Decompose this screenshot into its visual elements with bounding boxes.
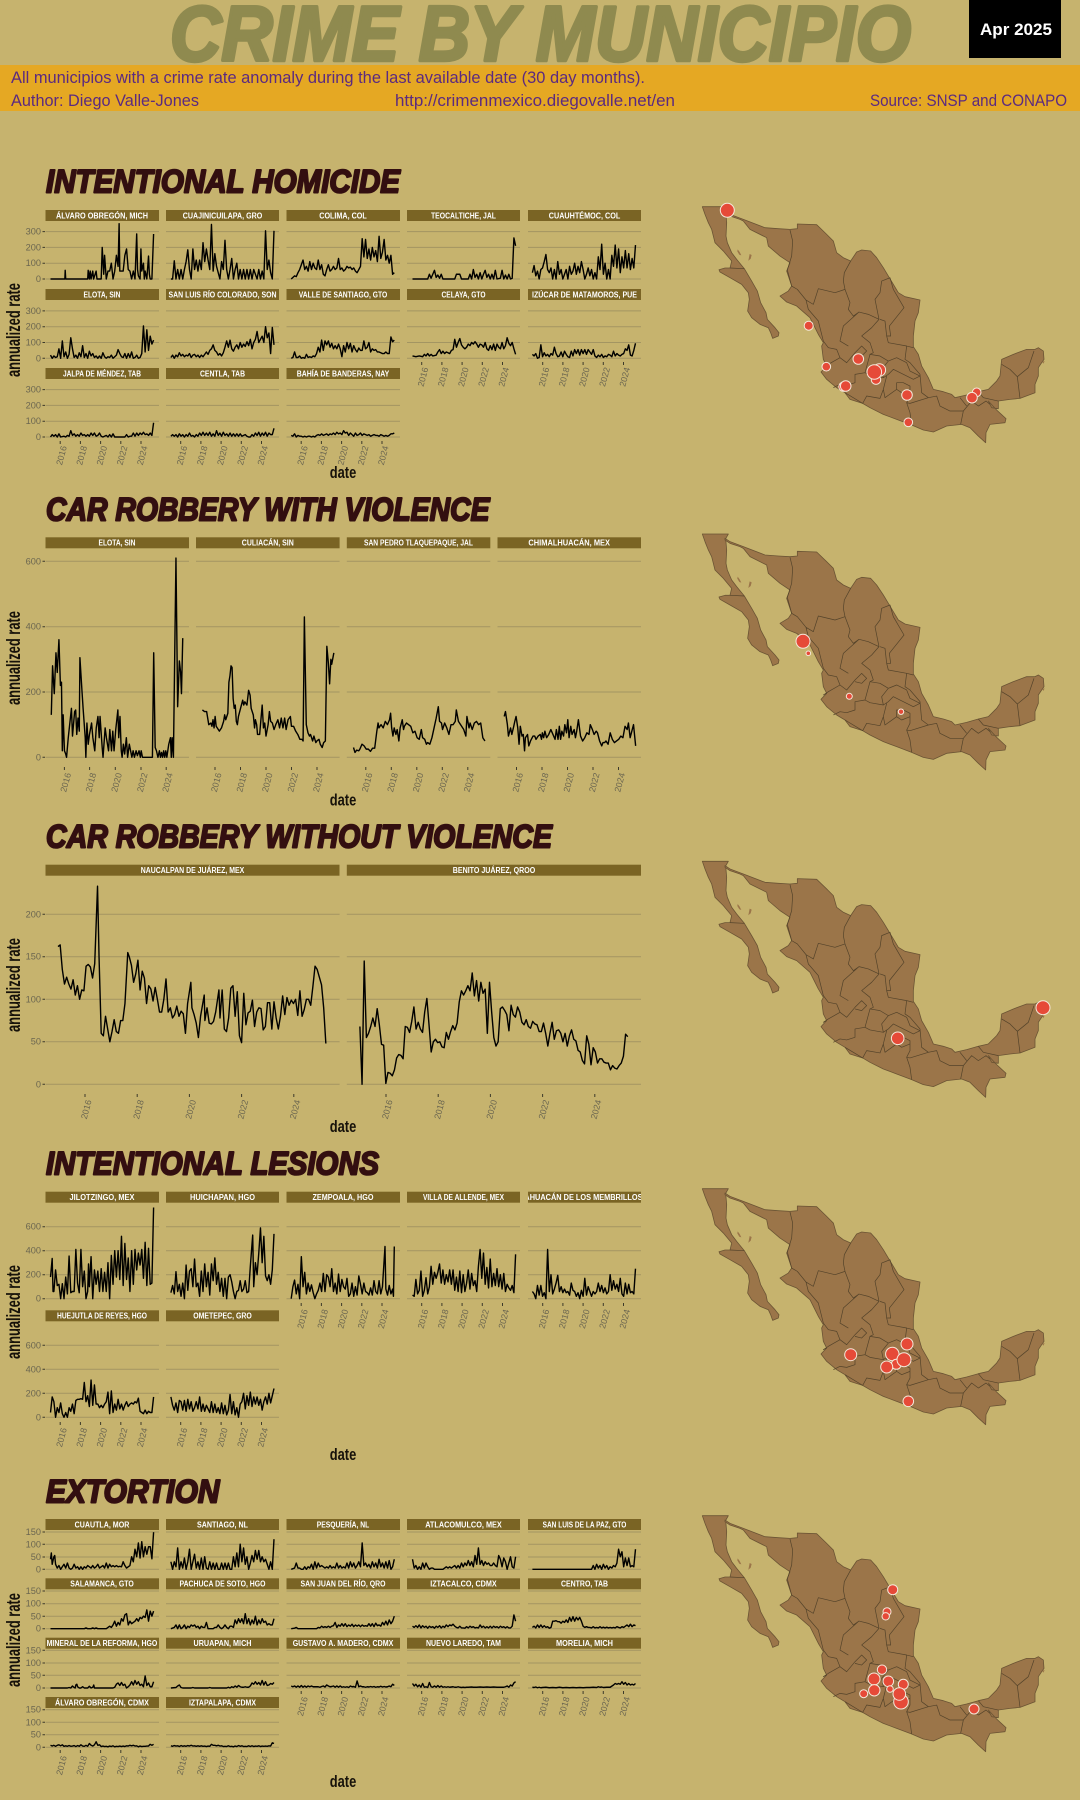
chart: Naucalpan de Juárez, MEX: NAUCALPAN DE JUÁREZ, MEX: [141, 865, 244, 875]
x axis: extortion: 2016: [295, 1696, 310, 1717]
x axis: extortion: 2018: [436, 1696, 451, 1717]
x axis: extortion: date: [330, 1772, 356, 1791]
chart: Salamanca, GTO: SALAMANCA, GTO: [70, 1579, 134, 1589]
chart: Elota, SIN: ELOTA, SIN: [98, 538, 136, 548]
map: intentional lesions: [702, 1189, 1045, 1425]
chart: Colima, COL: COLIMA, COL: [319, 210, 367, 220]
y axis: homicide: [4, 227, 45, 442]
x axis: intentional lesions: 2016: [537, 1308, 551, 1330]
y axis: intentional lesions: 200: [26, 1270, 41, 1280]
y axis: homicide: 100: [26, 416, 41, 426]
chart: Benito Juárez, QROO: BENITO JUÁREZ, QROO: [453, 865, 535, 875]
x axis: intentional lesions: 2020: [95, 1427, 109, 1448]
panel: extortion: [4, 1474, 1045, 1791]
chart: San Luis Río Colorado, SON: SAN LUIS RÍO COLORADO, SON: [168, 289, 276, 299]
y axis: homicide: 300: [26, 306, 41, 316]
y axis: extortion: 100: [26, 1539, 41, 1549]
x axis: extortion: 2016: [416, 1696, 430, 1717]
panel: car robbery without violence: [4, 818, 1050, 1136]
x axis: car robbery with violence: 2016: [209, 772, 224, 793]
y axis: car robbery with violence: 0: [36, 752, 41, 762]
chart: Huejutla de Reyes, HGO: HUEJUTLA DE REYES, HGO: [57, 1311, 147, 1321]
x axis: intentional lesions: 2022: [597, 1308, 612, 1330]
x axis: homicide: 2022: [356, 445, 370, 466]
chart: Santiago, NL: SANTIAGO, NL: [197, 1519, 248, 1529]
heading: intentional lesions: INTENTIONAL LESIONS: [46, 1146, 380, 1182]
x axis: homicide: 2022: [476, 366, 491, 388]
x axis: car robbery without violence: 2020: [183, 1099, 198, 1120]
chart: Centro, TAB: CENTRO, TAB: [561, 1579, 608, 1589]
y axis: car robbery with violence: 400: [26, 622, 41, 632]
chart: Villa de Allende, MEX: VILLA DE ALLENDE, MEX: [423, 1192, 504, 1202]
y axis: car robbery without violence: 150: [26, 952, 41, 962]
x axis: homicide: 2018: [195, 445, 210, 466]
y axis: extortion: 50: [31, 1670, 41, 1680]
x axis: extortion: 2020: [456, 1696, 471, 1717]
x axis: intentional lesions: 2024: [255, 1427, 270, 1448]
chart: Santiago, NL: [166, 1519, 279, 1569]
y axis: car robbery without violence: annualized rate: [4, 938, 25, 1032]
chart: Ixtlahuacán de los Membrillos, JAL: IXTLAHUACÁN DE LOS MEMBRILLOS, JAL: [508, 1192, 660, 1202]
x axis: intentional lesions: 2018: [74, 1427, 89, 1448]
x axis: car robbery without violence: 2018: [432, 1099, 447, 1120]
x axis: car robbery with violence: 2022: [135, 772, 150, 793]
chart: Uruapan, MICH: URUAPAN, MICH: [194, 1638, 252, 1648]
x axis: car robbery with violence: 2018: [536, 772, 551, 793]
x axis: homicide: date: [330, 463, 356, 482]
x axis: homicide: 2020: [336, 445, 350, 466]
x axis: car robbery without violence: [79, 1094, 603, 1136]
chart: Huichapan, HGO: [166, 1192, 279, 1299]
x axis: intentional lesions: 2020: [336, 1308, 350, 1330]
x axis: intentional lesions: 2024: [496, 1308, 511, 1330]
chart: Pachuca de Soto, HGO: PACHUCA DE SOTO, HGO: [180, 1579, 266, 1589]
x axis: extortion: 2016: [175, 1755, 189, 1776]
chart: Zempoala, HGO: ZEMPOALA, HGO: [312, 1192, 374, 1202]
x axis: extortion: 2022: [235, 1755, 250, 1776]
chart: Cuajinicuilapa, GRO: CUAJINICUILAPA, GRO: [183, 210, 263, 220]
x axis: extortion: 2020: [577, 1696, 592, 1717]
x axis: car robbery without violence: 2016: [380, 1099, 395, 1120]
x axis: homicide: 2022: [597, 366, 612, 388]
chart: Cuauhtémoc, COL: [528, 210, 641, 279]
chart: Pesquería, NL: PESQUERÍA, NL: [317, 1519, 369, 1529]
chart: Álvaro Obregón, MICH: [46, 209, 159, 279]
y axis: extortion: 100: [26, 1717, 41, 1727]
x axis: intentional lesions: 2024: [135, 1427, 150, 1448]
chart: Álvaro Obregón, CDMX: [46, 1696, 159, 1747]
x axis: car robbery without violence: 2024: [288, 1099, 302, 1120]
chart: Elota, SIN: [46, 537, 189, 757]
x axis: car robbery with violence: [58, 767, 627, 810]
y axis: extortion: 0: [36, 1624, 41, 1634]
map: homicide: [702, 203, 1045, 443]
y axis: car robbery without violence: 50: [31, 1037, 41, 1047]
x axis: intentional lesions: 2016: [54, 1427, 69, 1448]
x axis: homicide: 2020: [577, 366, 592, 388]
x axis: extortion: 2022: [115, 1755, 129, 1776]
x axis: homicide: 2020: [95, 445, 109, 466]
x axis: car robbery with violence: 2016: [58, 772, 73, 793]
map: extortion: [702, 1516, 1045, 1752]
x axis: extortion: 2024: [496, 1696, 511, 1717]
x axis: car robbery without violence: 2016: [79, 1099, 94, 1120]
y axis: extortion: 50: [31, 1730, 41, 1740]
chart: San Luis de la Paz, GTO: [528, 1519, 641, 1569]
x axis: homicide: 2018: [436, 366, 451, 388]
date badge: Apr 2025: [980, 20, 1052, 39]
y axis: intentional lesions: 600: [26, 1222, 41, 1232]
chart: Pesquería, NL: [286, 1519, 400, 1569]
y axis: extortion: 150: [26, 1645, 41, 1655]
x axis: car robbery without violence: 2018: [131, 1099, 146, 1120]
x axis: intentional lesions: date: [330, 1445, 356, 1464]
x axis: homicide: 2016: [416, 366, 430, 388]
chart: Bahía de Banderas, NAY: BAHÍA DE BANDERAS, NAY: [297, 368, 390, 378]
x axis: extortion: 2024: [617, 1696, 632, 1717]
x axis: homicide: 2024: [135, 445, 150, 466]
x axis: intentional lesions: 2018: [195, 1427, 210, 1448]
x axis: homicide: 2022: [115, 445, 129, 466]
chart: Culiacán, SIN: [196, 537, 340, 757]
y axis: intentional lesions: 0: [36, 1412, 41, 1422]
y axis: homicide: 100: [26, 338, 41, 348]
y axis: intentional lesions: 400: [26, 1246, 41, 1256]
y axis: car robbery without violence: 0: [36, 1079, 41, 1089]
x axis: extortion: 2016: [537, 1696, 551, 1717]
y axis: car robbery without violence: 100: [26, 994, 41, 1004]
chart: San Luis Río Colorado, SON: [166, 289, 279, 358]
chart: Mineral de la Reforma, HGO: MINERAL DE LA REFORMA, HGO: [47, 1638, 158, 1648]
x axis: homicide: 2024: [376, 445, 391, 466]
chart: Centla, TAB: CENTLA, TAB: [200, 368, 245, 378]
x axis: car robbery with violence: date: [330, 791, 356, 810]
x axis: extortion: 2022: [597, 1696, 612, 1717]
y axis: homicide: 100: [26, 258, 41, 268]
chart: Nuevo Laredo, TAM: [407, 1638, 520, 1688]
x axis: intentional lesions: 2024: [376, 1308, 391, 1330]
chart: Morelia, MICH: MORELIA, MICH: [556, 1638, 613, 1648]
chart: Izúcar de Matamoros, PUE: [528, 288, 641, 358]
chart: Celaya, GTO: CELAYA, GTO: [442, 289, 486, 299]
chart: San Juan del Río, QRO: [286, 1578, 400, 1629]
chart: Ixtlahuacán de los Membrillos, JAL: [528, 1192, 641, 1300]
chart: Jilotzingo, MEX: JILOTZINGO, MEX: [70, 1192, 135, 1202]
y axis: car robbery with violence: 200: [26, 687, 41, 697]
chart: Uruapan, MICH: [166, 1638, 279, 1688]
x axis: car robbery with violence: 2020: [411, 772, 425, 793]
x axis: extortion: 2016: [54, 1755, 69, 1776]
x axis: extortion: 2022: [356, 1696, 370, 1717]
x axis: homicide: 2018: [315, 445, 330, 466]
chart: Pachuca de Soto, HGO: [166, 1578, 279, 1629]
chart: Huichapan, HGO: HUICHAPAN, HGO: [190, 1192, 255, 1202]
chart: Gustavo A. Madero, CDMX: GUSTAVO A. MADERO, CDMX: [293, 1638, 394, 1648]
y axis: car robbery without violence: [4, 909, 45, 1089]
y axis: homicide: annualized rate: [4, 283, 25, 377]
chart: Salamanca, GTO: [46, 1578, 159, 1629]
y axis: extortion: 100: [26, 1658, 41, 1668]
map: car robbery with violence: [702, 534, 1045, 770]
x axis: homicide: 2016: [295, 445, 310, 466]
x axis: homicide: 2020: [456, 366, 471, 388]
chart: Zempoala, HGO: [286, 1192, 400, 1299]
subtitle banner: http://crimenmexico.diegovalle.net/en: [395, 92, 675, 110]
date badge: [969, 0, 1061, 58]
chart: Jalpa de Méndez, TAB: [46, 368, 159, 437]
y axis: car robbery with violence: 600: [26, 556, 41, 566]
x axis: extortion: 2020: [336, 1696, 350, 1717]
x axis: car robbery with violence: 2020: [109, 772, 124, 793]
y axis: intentional lesions: [4, 1222, 45, 1422]
chart: Gustavo A. Madero, CDMX: [286, 1638, 400, 1688]
chart: Ometepec, GRO: [166, 1310, 279, 1417]
y axis: extortion: 0: [36, 1683, 41, 1693]
x axis: car robbery with violence: 2020: [561, 772, 576, 793]
chart: Naucalpan de Juárez, MEX: [46, 865, 340, 1084]
x axis: car robbery with violence: 2024: [462, 772, 476, 793]
x axis: car robbery without violence: 2024: [589, 1099, 603, 1120]
x axis: extortion: 2018: [195, 1755, 210, 1776]
chart: Ometepec, GRO: OMETEPEC, GRO: [193, 1311, 252, 1321]
x axis: homicide: 2016: [175, 445, 189, 466]
y axis: extortion: 0: [36, 1564, 41, 1574]
x axis: extortion: 2020: [95, 1755, 109, 1776]
x axis: car robbery without violence: 2020: [484, 1099, 499, 1120]
y axis: intentional lesions: annualized rate: [4, 1265, 25, 1359]
chart: Atlacomulco, MEX: [407, 1519, 520, 1569]
y axis: car robbery without violence: 200: [26, 909, 41, 919]
x axis: intentional lesions: 2020: [577, 1308, 592, 1330]
y axis: extortion: annualized rate: [4, 1593, 25, 1687]
x axis: extortion: 2020: [215, 1755, 230, 1776]
chart: Teocaltiche, JAL: TEOCALTICHE, JAL: [431, 210, 496, 220]
x axis: homicide: 2020: [215, 445, 230, 466]
chart: Iztacalco, CDMX: [407, 1578, 520, 1629]
chart: Cuauhtémoc, COL: CUAUHTÉMOC, COL: [549, 210, 620, 220]
chart: San Pedro Tlaquepaque, JAL: SAN PEDRO TLAQUEPAQUE, JAL: [364, 538, 473, 548]
chart: Mineral de la Reforma, HGO: [46, 1638, 159, 1688]
chart: Valle de Santiago, GTO: VALLE DE SANTIAGO, GTO: [299, 289, 387, 299]
chart: Iztacalco, CDMX: IZTACALCO, CDMX: [430, 1579, 497, 1589]
chart: Nuevo Laredo, TAM: NUEVO LAREDO, TAM: [426, 1638, 501, 1648]
y axis: intentional lesions: 200: [26, 1388, 41, 1398]
x axis: intentional lesions: 2018: [436, 1308, 451, 1330]
y axis: extortion: 150: [26, 1586, 41, 1596]
x axis: intentional lesions: 2022: [476, 1308, 491, 1330]
x axis: extortion: 2018: [557, 1696, 572, 1717]
x axis: intentional lesions: 2022: [115, 1427, 129, 1448]
x axis: intentional lesions: 2016: [295, 1308, 310, 1330]
x axis: homicide: 2022: [235, 445, 250, 466]
x axis: car robbery with violence: 2016: [360, 772, 374, 793]
x axis: car robbery with violence: 2022: [285, 772, 300, 793]
chart: Álvaro Obregón, CDMX: ÁLVARO OBREGÓN, CDMX: [55, 1696, 149, 1707]
chart: San Pedro Tlaquepaque, JAL: [347, 537, 490, 757]
map: car robbery without violence: [702, 861, 1050, 1097]
x axis: car robbery without violence: 2022: [537, 1099, 551, 1120]
chart: Chimalhuacán, MEX: [498, 537, 641, 757]
x axis: homicide: 2016: [54, 445, 69, 466]
x axis: extortion: 2024: [376, 1696, 391, 1717]
x axis: intentional lesions: 2016: [416, 1308, 430, 1330]
x axis: car robbery with violence: 2018: [234, 772, 249, 793]
x axis: intentional lesions: [54, 1303, 632, 1464]
y axis: intentional lesions: 600: [26, 1340, 41, 1350]
x axis: homicide: [54, 362, 632, 482]
chart: Culiacán, SIN: CULIACÁN, SIN: [242, 538, 294, 548]
x axis: car robbery with violence: 2018: [84, 772, 98, 793]
heading: car robbery without violence: CAR ROBBERY WITHOUT VIOLENCE: [46, 818, 553, 854]
x axis: car robbery without violence: date: [330, 1117, 356, 1136]
chart: Centla, TAB: [166, 368, 279, 437]
subtitle banner: [0, 65, 1080, 111]
chart: Cuautla, MOR: [46, 1519, 159, 1569]
chart: Izúcar de Matamoros, PUE: IZÚCAR DE MATAMOROS, PUE: [532, 288, 637, 299]
x axis: car robbery with violence: 2016: [510, 772, 525, 793]
heading: extortion: EXTORTION: [46, 1474, 220, 1510]
x axis: intentional lesions: 2020: [215, 1427, 230, 1448]
x axis: intentional lesions: 2016: [175, 1427, 189, 1448]
y axis: homicide: 0: [36, 274, 41, 284]
heading: car robbery with violence: CAR ROBBERY WITH VIOLENCE: [46, 492, 491, 528]
y axis: homicide: 300: [26, 385, 41, 395]
x axis: car robbery with violence: 2022: [587, 772, 602, 793]
chart: Teocaltiche, JAL: [407, 210, 520, 279]
x axis: intentional lesions: 2018: [315, 1308, 330, 1330]
x axis: car robbery with violence: 2024: [612, 772, 627, 793]
subtitle banner: All municipios with a crime rate anomaly during the last available date (30 day months).: [11, 69, 645, 87]
chart: Atlacomulco, MEX: ATLACOMULCO, MEX: [425, 1519, 502, 1529]
x axis: car robbery with violence: 2018: [385, 772, 400, 793]
x axis: extortion: 2022: [476, 1696, 491, 1717]
x axis: car robbery with violence: 2020: [260, 772, 275, 793]
x axis: homicide: 2018: [557, 366, 572, 388]
x axis: car robbery with violence: 2022: [436, 772, 451, 793]
x axis: intentional lesions: 2024: [617, 1308, 632, 1330]
chart: Iztapalapa, CDMX: [166, 1697, 279, 1747]
chart: Jilotzingo, MEX: [46, 1192, 159, 1299]
x axis: homicide: 2016: [537, 366, 551, 388]
x axis: extortion: [54, 1691, 632, 1791]
x axis: car robbery with violence: 2024: [311, 772, 326, 793]
subtitle banner: Author: Diego Valle-Jones: [11, 92, 199, 110]
y axis: intentional lesions: 400: [26, 1364, 41, 1374]
panel: intentional lesions: [4, 1146, 1045, 1464]
x axis: extortion: 2018: [315, 1696, 330, 1717]
x axis: homicide: 2018: [74, 445, 89, 466]
y axis: extortion: 100: [26, 1599, 41, 1609]
y axis: extortion: 50: [31, 1611, 41, 1621]
chart: Benito Juárez, QROO: [347, 865, 641, 1084]
x axis: extortion: 2024: [135, 1755, 150, 1776]
y axis: homicide: 200: [26, 242, 41, 252]
y axis: homicide: 0: [36, 353, 41, 363]
chart: Celaya, GTO: [407, 289, 520, 358]
y axis: car robbery with violence: annualized rate: [4, 611, 25, 705]
subtitle banner: Source: SNSP and CONAPO: [870, 92, 1067, 110]
chart: Huejutla de Reyes, HGO: [46, 1310, 159, 1417]
heading: intentional homicide: INTENTIONAL HOMICIDE: [46, 164, 402, 200]
chart: Centro, TAB: [528, 1578, 641, 1629]
x axis: car robbery with violence: 2024: [160, 772, 175, 793]
y axis: extortion: 0: [36, 1742, 41, 1752]
x axis: extortion: 2018: [74, 1755, 89, 1776]
chart: Valle de Santiago, GTO: [286, 289, 400, 358]
chart: Chimalhuacán, MEX: CHIMALHUACÁN, MEX: [528, 538, 610, 548]
y axis: homicide: 200: [26, 400, 41, 410]
y axis: car robbery with violence: [4, 556, 45, 762]
y axis: extortion: 50: [31, 1552, 41, 1562]
x axis: homicide: 2024: [255, 445, 270, 466]
y axis: intentional lesions: 0: [36, 1294, 41, 1304]
chart: Colima, COL: [286, 210, 400, 279]
chart: Iztapalapa, CDMX: IZTAPALAPA, CDMX: [189, 1697, 256, 1707]
chart: San Juan del Río, QRO: SAN JUAN DEL RÍO, QRO: [300, 1579, 386, 1589]
x axis: intentional lesions: 2020: [456, 1308, 471, 1330]
chart: Morelia, MICH: [528, 1638, 641, 1688]
panel: car robbery with violence: [4, 492, 1045, 810]
chart: Elota, SIN: [46, 289, 159, 358]
x axis: intentional lesions: 2018: [557, 1308, 572, 1330]
y axis: extortion: 150: [26, 1705, 41, 1715]
x axis: homicide: 2024: [496, 366, 511, 388]
panel: intentional homicide: [4, 164, 1045, 482]
x axis: car robbery without violence: 2022: [236, 1099, 250, 1120]
x axis: intentional lesions: 2022: [356, 1308, 370, 1330]
x axis: homicide: 2024: [617, 366, 632, 388]
chart: Jalpa de Méndez, TAB: JALPA DE MÉNDEZ, TAB: [63, 368, 141, 378]
y axis: homicide: 300: [26, 227, 41, 237]
y axis: homicide: 200: [26, 322, 41, 332]
chart: Cuajinicuilapa, GRO: [166, 210, 279, 279]
y axis: extortion: [4, 1527, 45, 1752]
chart: Álvaro Obregón, MICH: ÁLVARO OBREGÓN, MICH: [56, 209, 148, 220]
chart: Villa de Allende, MEX: [407, 1192, 520, 1299]
chart: San Luis de la Paz, GTO: SAN LUIS DE LA PAZ, GTO: [543, 1519, 627, 1529]
chart: Elota, SIN: ELOTA, SIN: [84, 289, 120, 299]
chart: Cuautla, MOR: CUAUTLA, MOR: [75, 1519, 130, 1529]
x axis: intentional lesions: 2022: [235, 1427, 250, 1448]
y axis: homicide: 0: [36, 432, 41, 442]
y axis: extortion: 150: [26, 1527, 41, 1537]
x axis: extortion: 2024: [255, 1755, 270, 1776]
chart: Bahía de Banderas, NAY: [286, 368, 400, 437]
